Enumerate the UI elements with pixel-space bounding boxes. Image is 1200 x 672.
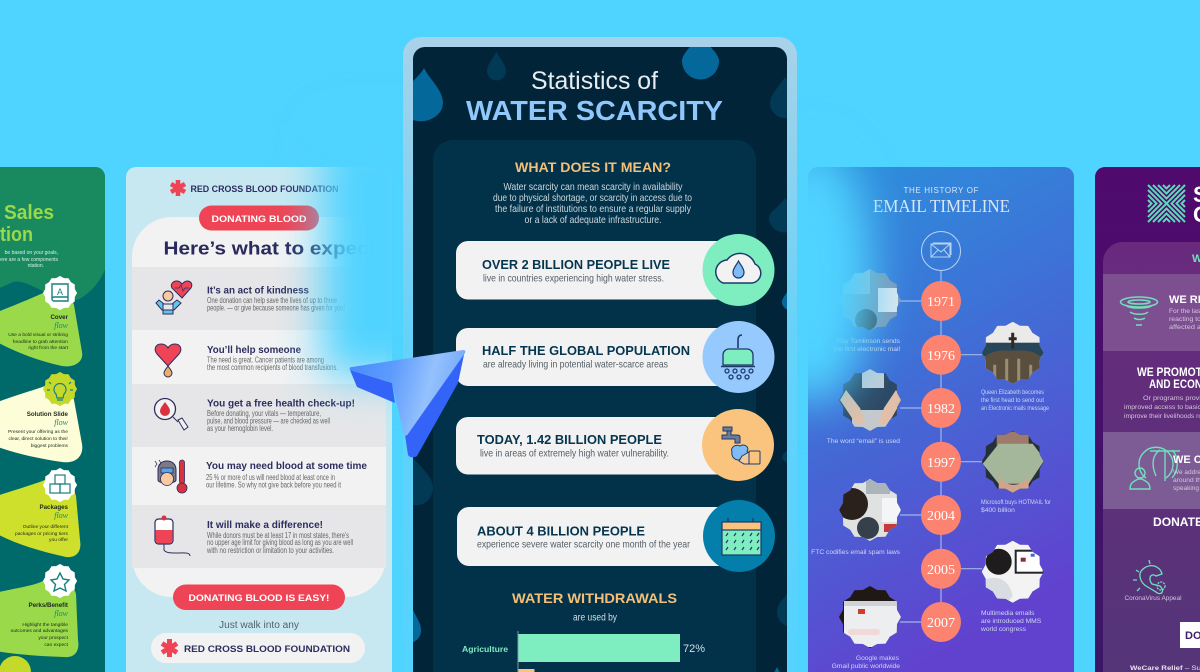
stat: about 4 billion (457, 500, 775, 572)
photo: 1971 desk (842, 269, 901, 331)
section: cover: Cover (50, 314, 69, 321)
row: it will make a difference: While donors must be at least 17 in most states, there’s (207, 531, 349, 540)
captions: world congress (980, 626, 1027, 633)
row: free health check-up: as your hemoglobin level. (207, 424, 273, 433)
text: are used by: are used by (573, 612, 617, 624)
timeline spine (900, 271, 982, 622)
title (466, 67, 723, 126)
section: cover (0, 275, 82, 366)
bar chart: 72% (683, 643, 705, 655)
section: solution slide: clear, direct solution to their (8, 436, 68, 442)
text: just walk into any: Just walk into any (219, 620, 299, 631)
label: coronavirus appeal: CoronaVirus Appeal (1124, 596, 1182, 602)
block: we promote: improved access to basic (1124, 405, 1200, 411)
heading: what does it mean: WHAT DOES IT MEAN? (515, 159, 671, 175)
captions: an Electronic mails message (981, 405, 1049, 412)
row: free health check-up (154, 398, 355, 433)
captions: the first electronic mail (833, 346, 901, 353)
section: perks and benefit: can expect (44, 642, 69, 648)
photo: laptop hands (838, 368, 902, 432)
row: you'll help someone: You’ll help someone (207, 344, 301, 356)
panel: red cross donating blood card (126, 167, 392, 672)
year markers: 2007 (927, 616, 955, 631)
section: perks and benefit: flow (54, 609, 69, 618)
badge: next section (0, 656, 31, 672)
section: packages: you offer (49, 537, 68, 543)
logo: red cross foundation: RED CROSS BLOOD FOUNDATION (190, 184, 338, 194)
year markers: 2005 (927, 563, 955, 578)
heading: the history of email timeline (874, 187, 1010, 212)
photo: crown (981, 321, 1045, 385)
stat: over 2 billion (456, 234, 774, 306)
arrow: 3d blue cursor (350, 350, 465, 457)
photo: gmail (838, 585, 902, 649)
photo: person at monitor (981, 540, 1045, 604)
title: Statistics of (531, 67, 658, 95)
row: it will make a difference (155, 516, 353, 556)
section: solution slide: flow (54, 418, 69, 427)
decorative water drops (398, 30, 807, 672)
captions: $400 billion (981, 507, 1015, 514)
stat: today 1.42 billion: live in areas of extremely high water vulnerability. (480, 448, 669, 460)
block: we promote: Or programs provi (1143, 396, 1200, 402)
heading: water withdrawals: WATER WITHDRAWALS (512, 590, 677, 606)
section: cover: flow (54, 321, 69, 330)
pill: red cross blood foundation: RED CROSS BLOOD FOUNDATION (184, 644, 350, 655)
block: we respond: reacting to (1169, 317, 1200, 323)
row: act of kindness: One donation can help save the lives of up to three (207, 296, 337, 305)
fade over cards (322, 125, 432, 377)
footer: wecare relief: WeCare Relief – Su (1130, 665, 1200, 672)
section: cover: headline to grab attention (13, 339, 68, 345)
row: you may need blood (155, 460, 367, 493)
stat: today 1.42 billion: TODAY, 1.42 BILLION PEOPLE (477, 432, 662, 447)
icon: person and heart (156, 281, 192, 314)
captions: Multimedia emails (981, 610, 1035, 617)
stat: about 4 billion: experience severe water scarcity one month of the year (477, 538, 690, 550)
row: it will make a difference: It will make a difference! (207, 519, 323, 531)
row: you'll help someone (155, 344, 338, 377)
block: we care: around th (1173, 478, 1200, 484)
block: we promote: improve their livelihoods ro (1124, 414, 1200, 420)
section: packages: flow (54, 511, 69, 520)
row: act of kindness: people. — or give because someone has given for you! (207, 304, 345, 312)
section: packages: Packages (39, 504, 69, 511)
section: cover: Use a bold visual or striking (8, 332, 68, 338)
heading: sales presentation (0, 204, 54, 241)
captions: the first head to send out (981, 397, 1044, 404)
block: we care (1130, 447, 1200, 492)
content panel (433, 140, 756, 672)
icon: magnifier with drop (154, 398, 188, 430)
stat: half the global population: HALF THE GLOBAL POPULATION (482, 343, 690, 358)
intro text: ntation. (28, 263, 44, 269)
captions: The word “email” is used (827, 438, 900, 445)
panel: water scarcity featured card (398, 30, 807, 672)
icon: cloud with drop (716, 253, 761, 283)
stat: over 2 billion: live in countries experiencing high water stress. (483, 272, 664, 284)
stat: half the global population: are already living in potential water-scarce areas (483, 358, 668, 370)
captions: Queen Elizabeth becomes (981, 389, 1045, 396)
year markers: 1971 (927, 295, 955, 310)
captions: Google makes (856, 655, 900, 662)
panel: purple charity card (1095, 167, 1200, 672)
row: you may need blood: You may need blood at some time (206, 460, 367, 472)
section: cover: right from the start (28, 345, 69, 351)
captions: FTC codifies email spam laws (811, 549, 901, 556)
year markers: 1982 (927, 402, 955, 417)
paragraph (493, 181, 692, 226)
row: act of kindness (156, 281, 345, 314)
button: donating blood is easy (173, 584, 345, 610)
section: solution slide: Present your offering as the (8, 429, 68, 435)
captions: Ray Tomlinson sends (837, 338, 901, 345)
row: it will make a difference: with no restriction or limitation to your activities. (206, 546, 334, 555)
paragraph: Water scarcity can mean scarcity in availability (504, 181, 683, 193)
section: packages: packages or pricing tiers (15, 531, 69, 537)
logo: woven x (1148, 185, 1185, 222)
intro text: be based on your goals, (5, 250, 58, 256)
icon: heart and drop (155, 344, 181, 377)
button: donate (1180, 622, 1200, 648)
captions: Microsoft buys HOTMAIL for (981, 499, 1052, 506)
row: free health check-up: pulse, and blood pressure — are checked as well (207, 416, 330, 426)
bar chart: Agriculture (462, 644, 508, 654)
icon: shower (721, 335, 755, 379)
bar chart (462, 631, 705, 672)
white content panel (132, 217, 386, 597)
icon: IV blood bag (155, 516, 190, 556)
section: perks and benefit: your prospect (38, 635, 69, 641)
year markers: 1997 (927, 456, 955, 471)
section: solution slide (0, 371, 82, 462)
row: free health check-up: You get a free health check-up! (207, 398, 355, 410)
icon: sick person and thermometer (155, 460, 187, 493)
icon: virus (1133, 560, 1165, 594)
captions: are introduced MMS (981, 618, 1042, 625)
row: act of kindness: It’s an act of kindness (207, 284, 309, 296)
captions: Gmail public worldwide (832, 663, 900, 670)
section: solution slide: Solution Slide (27, 411, 69, 418)
title: WATER SCARCITY (466, 95, 723, 126)
paragraph: or a lack of adequate infrastructure. (524, 214, 662, 226)
heading: sales presentation: tion (0, 224, 33, 246)
block: we care: We addre (1173, 470, 1200, 476)
section: packages (0, 467, 80, 557)
icon: envelope (922, 232, 960, 270)
intro text (0, 250, 58, 267)
block: we respond: For the last (1169, 309, 1200, 315)
paragraph: due to physical shortage, or scarcity in access due to (493, 192, 692, 204)
content panel (1103, 242, 1200, 672)
heading: here's what to expect: Here’s what to expect (164, 238, 376, 258)
block: we promote (1124, 367, 1200, 420)
icon: tornado (1120, 297, 1158, 325)
fade over cards (752, 145, 872, 405)
row: it will make a difference: no upper age limit for giving blood as long as you are well (207, 538, 353, 547)
stat: today 1.42 billion (456, 409, 774, 481)
panel: email timeline card (808, 167, 1074, 672)
year markers: 2004 (927, 509, 955, 524)
icon: tap and hand washing (722, 427, 760, 464)
icon: calendar (722, 518, 761, 555)
block: we care: speaking (1173, 486, 1199, 492)
section: perks and benefit: Perks/Benefit (28, 602, 68, 609)
row: you may need blood: our lifetime. So why not give back before you need it (206, 480, 342, 490)
row: free health check-up: Before donating, your vitals — temperature, (207, 409, 321, 418)
section: cover: A (57, 287, 63, 297)
stat: over 2 billion: OVER 2 BILLION PEOPLE LIVE (482, 257, 670, 272)
paragraph: the failure of institutions to ensure a regular supply (495, 203, 692, 215)
heading: the history of email timeline: THE HISTORY OF (904, 186, 979, 195)
logo wordmark (1193, 182, 1200, 227)
pill: red cross blood foundation (151, 633, 365, 663)
logo: red cross foundation (171, 180, 338, 196)
captions (811, 338, 1052, 670)
row: you'll help someone: the most common recipients of blood transfusions. (207, 363, 338, 372)
section: packages: Outline your different (23, 524, 69, 530)
panel: sales presentation template card (0, 167, 105, 672)
pill: donating blood (199, 206, 319, 230)
stat: half the global population (456, 321, 774, 393)
device frame (403, 37, 797, 672)
year markers (921, 281, 961, 642)
icon: globe and person (1130, 447, 1180, 489)
heading: the history of email timeline: EMAIL TIMELINE (873, 196, 1010, 216)
block: we respond (1120, 294, 1200, 331)
row: you may need blood: 25 % or more of us will need blood at least once in (206, 473, 335, 482)
year markers: 1976 (927, 349, 955, 364)
heading: sales presentation: Sales (4, 202, 54, 224)
photo: money (981, 430, 1045, 494)
button: donating blood is easy: DONATING BLOOD IS EASY! (188, 593, 330, 604)
row: you'll help someone: The need is great. Cancer patients are among (207, 356, 324, 364)
section: perks and benefit (0, 563, 78, 657)
photo: office (836, 478, 902, 542)
pill: donating blood: DONATING BLOOD (212, 214, 307, 225)
block: we respond: affected a (1169, 325, 1200, 331)
section: perks and benefit: outcomes and advantages (11, 628, 69, 634)
section: perks and benefit: Highlight the tangible (22, 622, 68, 628)
stat: about 4 billion: ABOUT 4 BILLION PEOPLE (477, 524, 645, 538)
section: solution slide: biggest problems (31, 443, 69, 449)
